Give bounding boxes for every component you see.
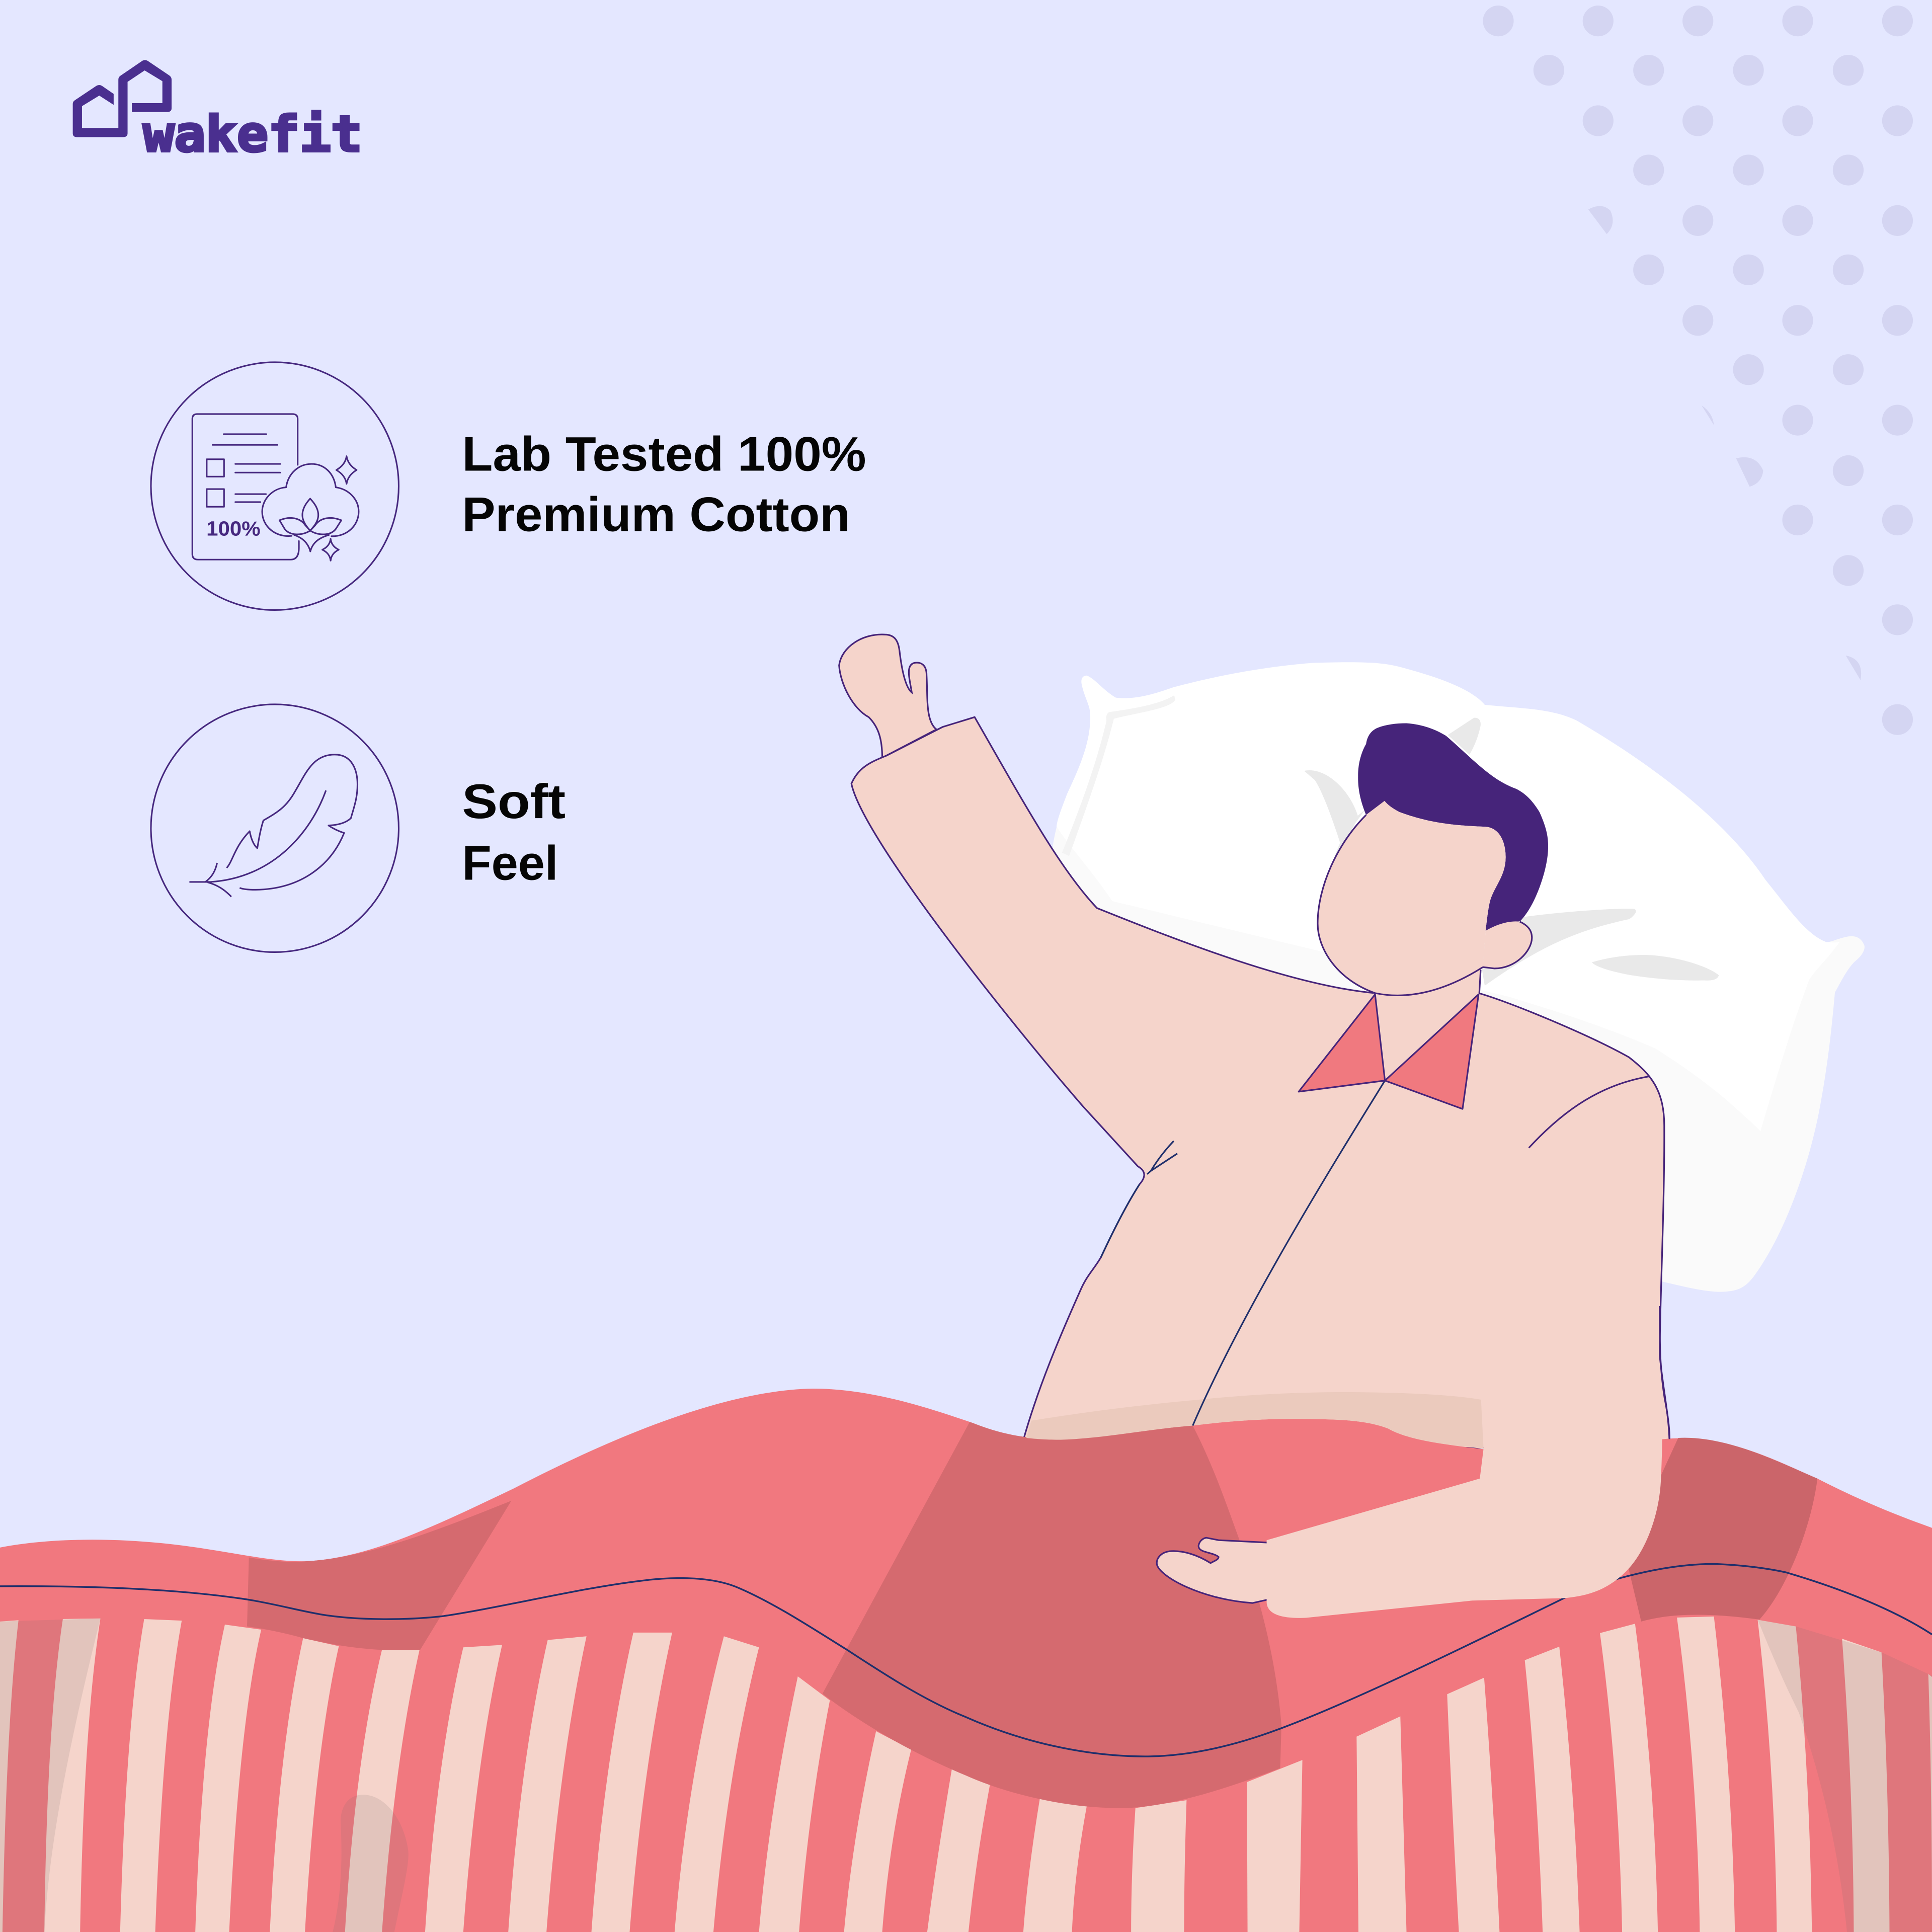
pillow	[1052, 662, 1865, 1292]
blanket wave line	[0, 1564, 1932, 1756]
heading: Lab Tested 100% Premium Cotton: Premium Cotton	[462, 488, 850, 542]
logo	[73, 60, 362, 164]
blanket fold shading	[247, 1422, 1817, 1808]
man: shirt collar	[1299, 994, 1479, 1109]
icon: lab tested cotton: 100%	[206, 517, 261, 540]
heading: Lab Tested 100% Premium Cotton	[462, 427, 866, 542]
man: torso and raised arm	[839, 634, 1669, 1448]
dot pattern	[1483, 6, 1913, 735]
heading: Lab Tested 100% Premium Cotton: Lab Tested 100%	[462, 427, 866, 481]
blanket stripes	[0, 1617, 1932, 1932]
heading: Soft Feel: Feel	[462, 836, 558, 891]
man: hand on blanket	[1157, 1538, 1269, 1603]
man: shirt shadow over blanket	[1026, 1392, 1484, 1449]
icon: lab tested cotton	[151, 362, 398, 610]
blanket stripe shadows	[0, 1619, 1932, 1932]
icon: feather	[151, 704, 398, 952]
blanket	[0, 1389, 1932, 1932]
logo: wakefit	[143, 106, 362, 164]
man: head	[1318, 723, 1548, 998]
man: forearm over blanket	[1267, 1380, 1662, 1618]
heading: Soft Feel: Soft	[462, 774, 566, 829]
man: shirt lines	[1101, 1076, 1669, 1439]
heading: Soft Feel	[462, 774, 566, 891]
